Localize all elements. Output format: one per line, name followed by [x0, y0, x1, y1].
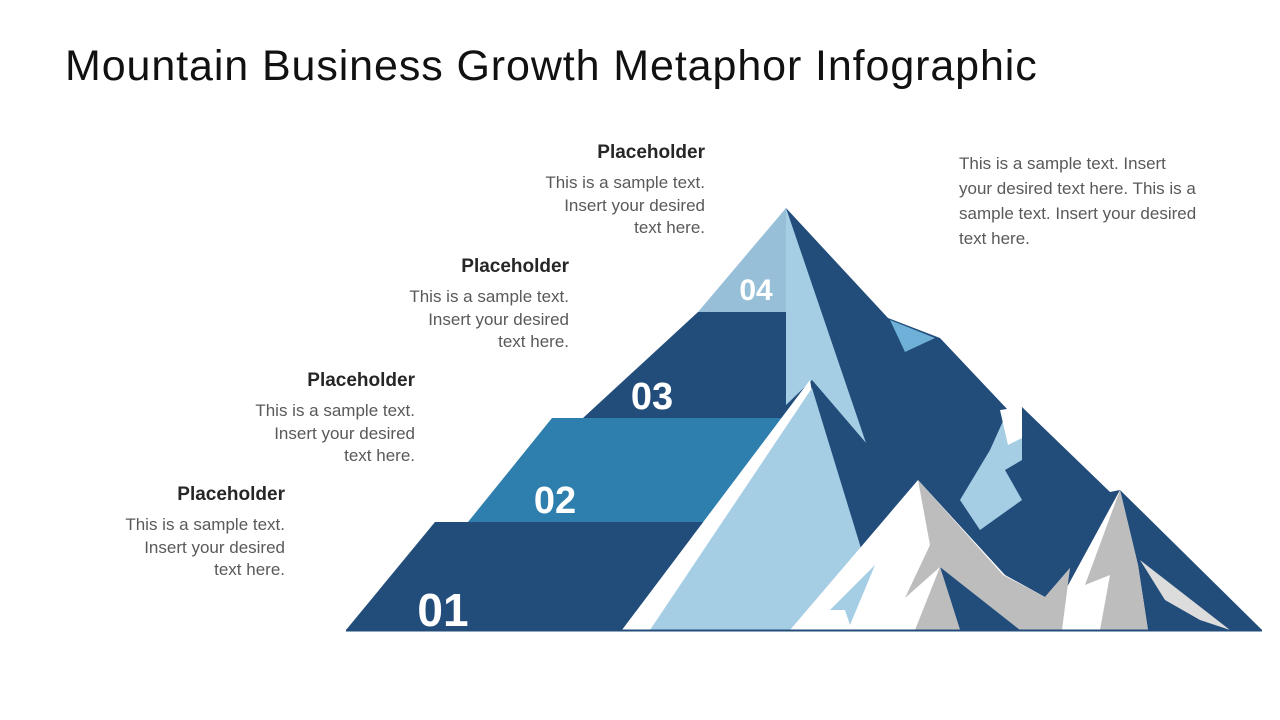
text block 03: Insert your desired — [428, 310, 569, 328]
step 03: 03 — [631, 376, 673, 418]
text block 04: Insert your desired — [564, 196, 705, 214]
text block 01: Placeholder — [177, 484, 285, 505]
step 04: 04 — [739, 274, 773, 307]
step 01 — [346, 522, 704, 636]
text block 03: This is a sample text. — [409, 287, 569, 306]
text block 03: text here. — [498, 332, 569, 351]
text block 01: This is a sample text. — [125, 515, 285, 534]
step 01: 01 — [417, 584, 469, 636]
text block 02: Placeholder — [307, 370, 415, 391]
main dark mountain — [786, 208, 1262, 630]
text block 04: Placeholder — [597, 142, 705, 163]
text block 02: This is a sample text. — [255, 401, 415, 420]
title: Mountain Business Growth Metaphor Infographic — [65, 42, 1038, 90]
text block 04: This is a sample text. — [545, 173, 705, 192]
text block 02 — [255, 370, 415, 465]
front light peak — [622, 380, 880, 630]
right text block: This is a sample text. Insert your desired text here. This is a sample text. Insert your desired text here. — [959, 154, 1196, 248]
text block 03 — [409, 256, 569, 351]
text block 04 — [545, 142, 705, 237]
text block 02: Insert your desired — [274, 424, 415, 442]
text block 04: text here. — [634, 218, 705, 237]
step 03 — [583, 312, 786, 418]
text block 02: text here. — [344, 446, 415, 465]
text block 01 — [125, 484, 285, 579]
step 04 — [698, 208, 786, 312]
snow peaks — [790, 480, 1262, 630]
text block 03: Placeholder — [461, 256, 569, 277]
text block 01: Insert your desired — [144, 538, 285, 556]
text block 01: text here. — [214, 560, 285, 579]
step 02 — [468, 418, 782, 522]
step 02: 02 — [534, 480, 576, 522]
